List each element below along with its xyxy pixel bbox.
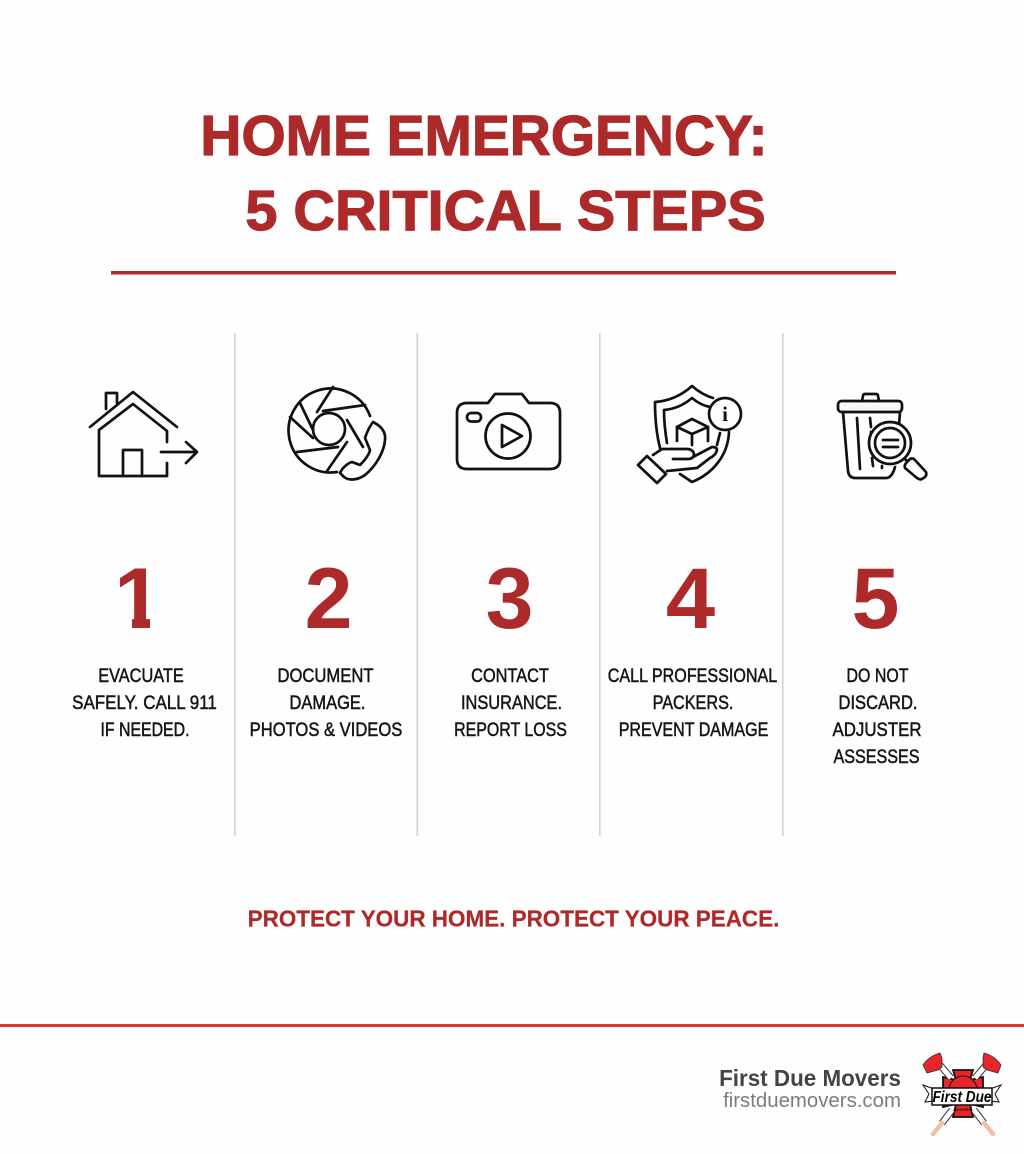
logo: First Due crest [923, 1053, 1001, 1134]
step 2 text [250, 665, 402, 740]
step 1 text: SAFELY. CALL 911 [72, 692, 217, 713]
footer brand name: First Due Movers [719, 1065, 901, 1091]
step 2 text: PHOTOS & VIDEOS [250, 719, 402, 740]
step 5 text: ADJUSTER [833, 719, 922, 740]
number 4: 4 [666, 551, 716, 647]
icon: shield with box, hand and info [638, 386, 741, 483]
step 4 text: CALL PROFESSIONAL [608, 665, 777, 686]
title: 5 CRITICAL STEPS [245, 179, 766, 243]
panel: step 4 call packers [608, 386, 777, 740]
step 1 text [72, 665, 217, 740]
icon: video camera [457, 394, 560, 469]
step 1 text: EVACUATE [98, 665, 184, 686]
panel: step 3 contact insurance [454, 394, 567, 740]
number 2: 2 [305, 551, 352, 647]
number 5: 5 [852, 551, 899, 647]
step 4 text: PREVENT DAMAGE [619, 719, 768, 740]
number 1: 1 [114, 551, 162, 647]
panel: step 2 document [250, 387, 402, 740]
title: HOME EMERGENCY: [200, 104, 768, 168]
icon: trash bin with magnifier [838, 394, 926, 479]
step 5 text: ASSESSES [833, 746, 920, 767]
step 3 text: INSURANCE. [461, 692, 562, 713]
info letter: i [722, 402, 728, 426]
logo: First Due crest: MOVERS [955, 1108, 971, 1112]
step 2 text: DOCUMENT [277, 665, 374, 686]
step 5 text: DO NOT [847, 665, 909, 686]
number 3: 3 [486, 551, 533, 647]
footer website: firstduemovers.com [723, 1090, 901, 1112]
step 2 text: DAMAGE. [290, 692, 365, 713]
step 5 text: DISCARD. [839, 692, 917, 713]
icon: house with exit arrow [90, 392, 197, 476]
tagline: PROTECT YOUR HOME. PROTECT YOUR PEACE. [248, 905, 779, 932]
title [200, 104, 768, 243]
step 4 text: PACKERS. [653, 692, 733, 713]
step 3 text [454, 665, 567, 740]
panel: step 5 do not discard [833, 394, 926, 767]
icon: camera aperture with phone [289, 387, 385, 479]
step 3 text: REPORT LOSS [454, 719, 567, 740]
step 1 text: IF NEEDED. [100, 719, 190, 740]
step 4 text [608, 665, 777, 740]
step 3 text: CONTACT [471, 665, 549, 686]
logo: First Due crest: First Due [932, 1089, 992, 1106]
panel: step 1 evacuate [72, 392, 217, 740]
step 5 text [833, 665, 922, 767]
